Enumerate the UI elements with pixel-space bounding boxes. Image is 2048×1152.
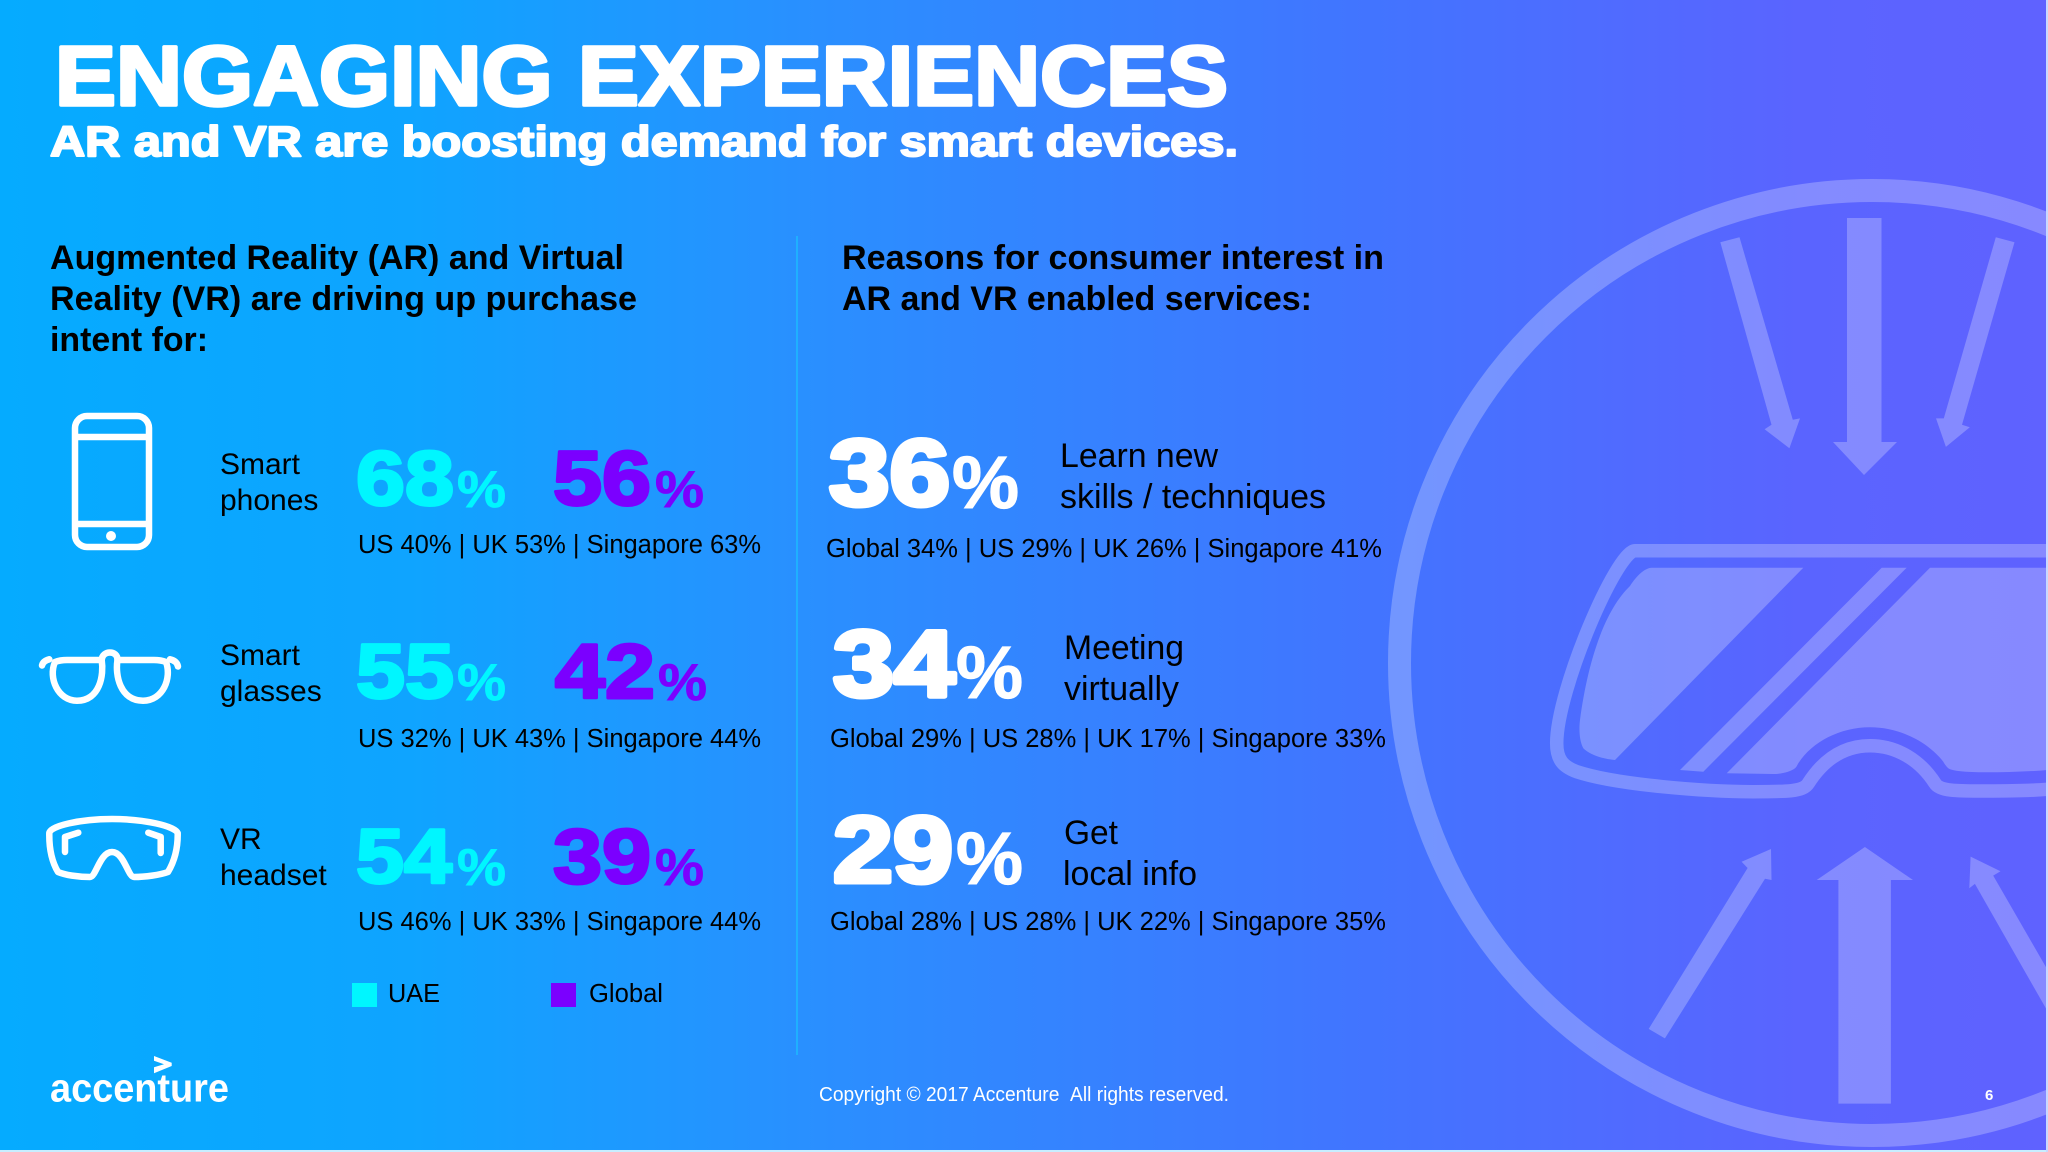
value 34%: % [956,631,1023,714]
Global value 39%: 39 [553,814,651,900]
label: get local info: local info [1063,855,1197,893]
right heading: Reasons for consumer interest in [842,239,1384,277]
label: smart glasses [220,639,322,708]
value 29%: 29 [833,797,953,902]
Global value 56% [553,436,704,522]
title: ENGAGING EXPERIENCES [55,29,1228,123]
left heading: Reality (VR) are driving up purchase [50,280,637,318]
label: VR headset: headset [220,859,327,892]
label: smart phones [220,448,318,517]
country breakdown: Global 34% | US 29% | UK 26% | Singapore 41% [826,535,1382,563]
Global value 39%: % [655,839,704,897]
right heading: AR and VR enabled services: [842,280,1312,318]
UAE value 68% [356,436,506,522]
value 29%: % [956,817,1023,900]
copyright: Copyright © 2017 Accenture All rights reserved. [819,1083,1229,1106]
emblem goggles outline [1557,551,2047,792]
label: meeting virtually [1064,629,1184,708]
right heading [842,239,1384,318]
UAE value 54% [356,814,506,900]
country breakdown: US 40% | UK 53% | Singapore 63% [358,531,761,559]
value 34%: 34 [833,611,955,716]
label: smart glasses: Smart [220,639,301,672]
legend item: Global: Global [589,980,663,1008]
label: learn new skills: skills / techniques [1060,478,1326,516]
label: smart phones: phones [220,484,318,517]
logo: accenture: accenture [50,1066,229,1110]
Global value 42%: % [658,654,707,712]
emblem ring [1400,190,2048,1136]
label: get local info [1063,814,1197,893]
country breakdown: US 46% | UK 33% | Singapore 44% [358,908,761,936]
label: smart glasses: glasses [220,675,322,708]
left heading [50,239,637,359]
background emblem: VR goggles in circle [1400,190,2048,1136]
label: VR headset [220,823,327,892]
panel: smart glasses row [42,629,761,753]
emblem arrows [1649,218,2048,1104]
legend [352,980,663,1008]
UAE value 55%: % [457,654,506,712]
UAE value 55%: 55 [356,629,454,715]
left heading: Augmented Reality (AR) and Virtual [50,239,624,277]
left heading: intent for: [50,321,208,359]
legend item: UAE [352,980,440,1008]
country breakdown: US 32% | UK 43% | Singapore 44% [358,725,761,753]
value 36% [829,420,1019,525]
panel: reason 29% get local info [830,797,1386,936]
UAE value 68%: 68 [356,436,454,522]
label: get local info: Get [1064,814,1119,852]
legend item: UAE: UAE [388,980,440,1008]
value 29% [833,797,1023,902]
subtitle: AR and VR are boosting demand for smart devices. [50,118,1238,166]
label: meeting virtually: virtually [1064,670,1179,708]
value 36%: % [952,441,1019,524]
icon: VR headset [49,819,178,877]
Global value 56%: % [655,461,704,519]
country breakdown: Global 28% | US 28% | UK 22% | Singapore 35% [830,908,1386,936]
panel: reason 34% meeting virtually [830,611,1386,753]
Global value 39% [553,814,704,900]
icon: smart phone [75,416,149,547]
UAE value 68%: % [457,461,506,519]
Global value 42%: 42 [555,629,655,715]
Global value 56%: 56 [553,436,651,522]
country breakdown: Global 29% | US 28% | UK 17% | Singapore 33% [830,725,1386,753]
emblem goggles lenses [1579,568,2048,774]
legend item: Global [551,980,663,1008]
panel: reason 36% learn new skills [826,420,1382,563]
value 36%: 36 [829,420,950,525]
value 34% [833,611,1023,716]
UAE value 55% [356,629,506,715]
divider [796,236,798,1055]
panel: smart phones row [75,416,761,559]
label: learn new skills: Learn new [1060,437,1218,475]
UAE value 54%: 54 [356,814,452,900]
UAE value 54%: % [457,839,506,897]
label: meeting virtually: Meeting [1064,629,1184,667]
panel: VR headset row [49,814,761,936]
page number: 6 [1985,1087,1993,1104]
label: smart phones: Smart [220,448,301,481]
icon: glasses [42,652,178,701]
label: learn new skills [1060,437,1326,516]
Global value 42% [555,629,707,715]
label: VR headset: VR [220,823,262,856]
